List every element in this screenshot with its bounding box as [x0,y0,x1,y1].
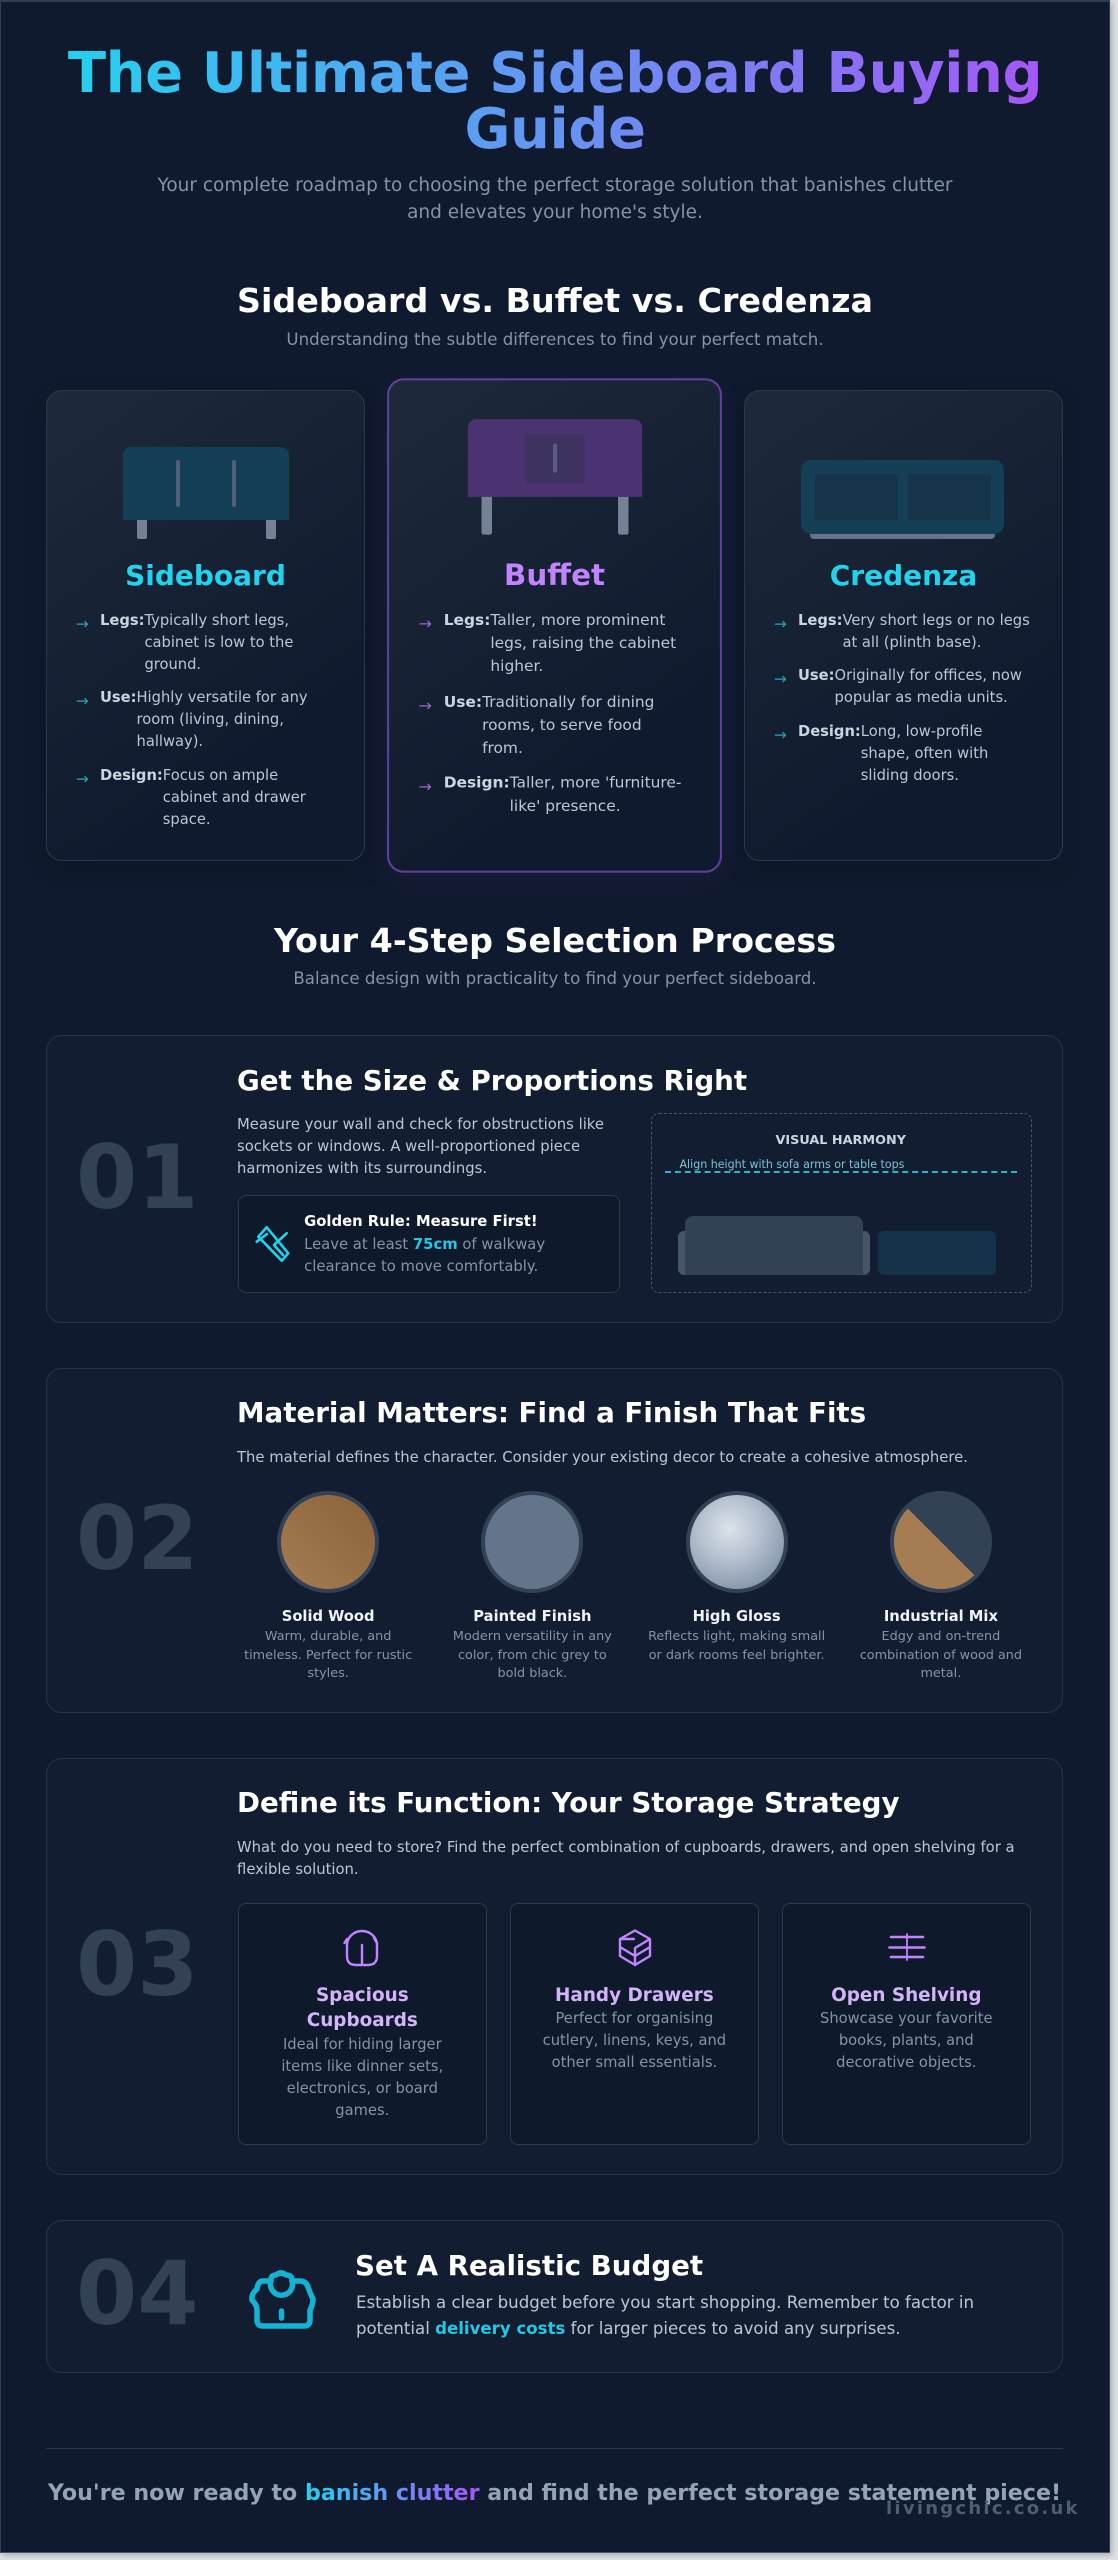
diagram: visual harmony [650,1113,1032,1293]
step number 03: 03 [76,1913,198,2016]
material: painted finish: Modern versatility in any [453,1629,612,1644]
buffet legs item: legs, raising the cabinet [490,635,676,652]
sideboard legs item [76,612,293,673]
storage: cupboards [238,1903,487,2145]
credenza design item: Long, low-profile [861,723,982,740]
material: painted finish [453,1491,612,1681]
shelving text [820,2010,993,2071]
panel: step 4 [46,2220,1063,2373]
buffet use item: → [419,696,432,715]
material: high gloss: or dark rooms feel brighter. [649,1648,825,1662]
material: solid wood: Warm, durable, and [265,1629,391,1644]
material: high gloss: Reflects light, making small [648,1629,825,1644]
step 3 heading: Define its Function: Your Storage Strategy [237,1786,900,1819]
process subheading: Balance design with practicality to find your perfect sideboard. [293,969,817,988]
buffet legs item: Legs: [444,611,490,629]
title: Guide [464,97,646,162]
sideboard legs item: → [76,615,89,633]
buffet use item: Traditionally for dining [482,693,654,711]
cupboards text: electronics, or board [287,2080,438,2097]
material: solid wood [244,1491,412,1681]
cupboards heading [307,1984,418,2031]
sideboard use item: room (living, dining, [137,711,284,728]
buffet design item: → [419,777,432,796]
buffet heading: Buffet [504,557,605,592]
step 3 text: flexible solution. [237,1861,359,1878]
step 1 text: harmonizes with its surroundings. [237,1160,487,1177]
material: solid wood: styles. [307,1666,349,1681]
buffet design item: Taller, more 'furniture- [510,774,681,792]
sideboard use item: → [76,692,89,710]
panel: credenza card [744,390,1063,861]
material: painted finish: color, from chic grey to [458,1648,607,1662]
material: industrial mix [860,1491,1022,1681]
sideboard legs item: Typically short legs, [144,612,289,629]
material: painted finish: Painted Finish [473,1608,591,1624]
cupboards text [281,2036,443,2119]
storage: drawers [510,1903,759,2145]
sideboard use item [76,688,308,750]
material: solid wood: timeless. Perfect for rustic [244,1648,412,1662]
credenza use item: → [774,670,787,688]
heading: process section: Your 4-Step Selection Process [274,921,836,960]
side table [878,1231,996,1275]
shelving text: Showcase your favorite [820,2010,993,2026]
material: high gloss [648,1491,825,1662]
subtitle [157,174,953,222]
shelving heading: Open Shelving [831,1984,982,2006]
step number 02: 02 [76,1487,198,1590]
credenza legs item: at all (plinth base). [842,634,981,651]
drawers text: other small essentials. [552,2054,717,2071]
step 1 text: Measure your wall and check for obstructions like [237,1116,604,1132]
drawers text: Perfect for organising [555,2010,713,2026]
credenza design item: → [774,726,787,744]
step number 01: 01 [76,1126,198,1229]
material: industrial mix: metal. [920,1666,961,1681]
credenza heading: Credenza [830,559,977,592]
step 1 text: sockets or windows. A well-proportioned piece [237,1138,580,1155]
buffet use item: rooms, to serve food [482,717,642,734]
shelving text: books, plants, and [839,2032,974,2049]
credenza legs item: Legs: [798,612,842,628]
sideboard design item: Design: [100,767,163,784]
step 2 heading: Material Matters: Find a Finish That Fits [237,1396,866,1429]
panel: sideboard card [46,390,365,861]
buffet design item [419,774,681,815]
credenza design item: shape, often with [861,745,988,762]
subtitle: Your complete roadmap to choosing the perfect storage solution that banishes clutter [157,174,953,196]
drawers text: cutlery, linens, keys, and [543,2032,726,2049]
title: The Ultimate Sideboard Buying [68,41,1042,106]
buffet use item: from. [482,740,523,758]
credenza use item [774,667,1022,706]
credenza legs item [774,612,1030,651]
cupboards heading: Cupboards [307,2010,418,2031]
credenza design item: Design: [798,723,861,740]
credenza design item [774,723,988,784]
buffet legs item: Taller, more prominent [490,611,665,629]
step 4 text: Establish a clear budget before you start shopping. Remember to factor in [356,2293,974,2312]
diagram title: VISUAL HARMONY [776,1133,906,1148]
credenza use item: Originally for offices, now [835,667,1022,684]
sideboard design item: cabinet and drawer [163,789,306,806]
step 4 text [356,2293,974,2338]
sideboard use item: Use: [100,688,137,706]
cupboards text: items like dinner sets, [281,2058,443,2075]
diagram annotation: Align height with sofa arms or table tops [680,1158,904,1171]
step 1 text [237,1116,604,1177]
credenza use item: popular as media units. [835,689,1008,706]
shelving text: decorative objects. [836,2054,976,2071]
material: industrial mix: combination of wood and [860,1648,1022,1662]
step number 04: 04 [76,2242,198,2345]
step 3 text [237,1838,1015,1878]
buffet use item [419,693,654,758]
credenza design item: sliding doors. [861,767,959,784]
comparison subheading: Understanding the subtle differences to find your perfect match. [286,330,824,349]
icon: sideboard [123,447,289,539]
cupboards text: Ideal for hiding larger [283,2036,442,2052]
panel: buffet card [387,378,722,873]
material: painted finish: bold black. [498,1666,567,1681]
callout text: Golden Rule: Measure First! [304,1213,538,1230]
sideboard legs item: Legs: [100,612,144,629]
material: high gloss: High Gloss [693,1608,781,1624]
buffet design item: Design: [444,774,510,792]
icon: buffet [468,419,642,535]
sideboard design item: Focus on ample [163,767,278,784]
credenza legs item: → [774,614,787,632]
sideboard design item: → [76,770,89,788]
sideboard use item: Highly versatile for any [137,688,308,706]
footer text [46,2448,1063,2508]
step 3 text: What do you need to store? Find the perfect combination of cupboards, drawers, and open shelving for a [237,1838,1015,1856]
subtitle: and elevates your home's style. [407,202,703,222]
buffet legs item: → [419,614,432,633]
storage: shelving [782,1903,1031,2145]
buffet design item: like' presence. [510,797,621,815]
sideboard heading: Sideboard [125,559,286,592]
buffet use item: Use: [444,693,482,711]
icon: budget [249,2270,316,2329]
callout text: Leave at least 75cm of walkway [304,1236,545,1252]
credenza use item: Use: [798,667,835,684]
icon: cupboard [343,1930,378,1966]
step 4 heading: Set A Realistic Budget [355,2249,703,2282]
credenza legs item: Very short legs or no legs [842,612,1030,628]
drawers text [543,2010,726,2071]
step 4 text: potential delivery costs for larger pieces to avoid any surprises. [356,2319,900,2338]
sideboard design item [76,767,306,828]
buffet legs item [419,611,676,676]
sideboard legs item: ground. [144,656,201,673]
icon: credenza [801,460,1004,539]
cupboards heading: Spacious [316,1984,409,2006]
alignment line [665,1171,1017,1173]
callout text [304,1213,545,1275]
sideboard design item: space. [163,811,211,828]
cupboards text: games. [335,2102,389,2119]
material: industrial mix: Industrial Mix [884,1608,998,1624]
icon: drawers [618,1929,652,1966]
callout text: clearance to move comfortably. [304,1258,538,1275]
callout: golden rule [238,1195,620,1293]
step 1 heading: Get the Size & Proportions Right [237,1064,747,1097]
step 2 text: The material defines the character. Consider your existing decor to create a cohesive atmosphere. [237,1448,968,1466]
icon: tape measure [255,1226,290,1262]
buffet legs item: higher. [490,658,543,676]
footer text: You're now ready to banish clutter and find the perfect storage statement piece! [48,2480,1061,2506]
icon: shelves [888,1933,926,1961]
sideboard use item: hallway). [137,733,203,750]
sideboard legs item: cabinet is low to the [144,634,293,651]
drawers heading: Handy Drawers [555,1984,714,2006]
panel: step 3 [46,1758,1063,2175]
watermark: livingchic.co.uk [886,2498,1080,2519]
panel: step 2 [46,1368,1063,1713]
panel: step 1 [46,1035,1063,1323]
material: solid wood: Solid Wood [282,1608,374,1624]
sofa [678,1216,870,1275]
heading: comparison section: Sideboard vs. Buffet vs. Credenza [237,281,873,320]
title [46,46,1064,158]
material: industrial mix: Edgy and on-trend [881,1629,1000,1644]
